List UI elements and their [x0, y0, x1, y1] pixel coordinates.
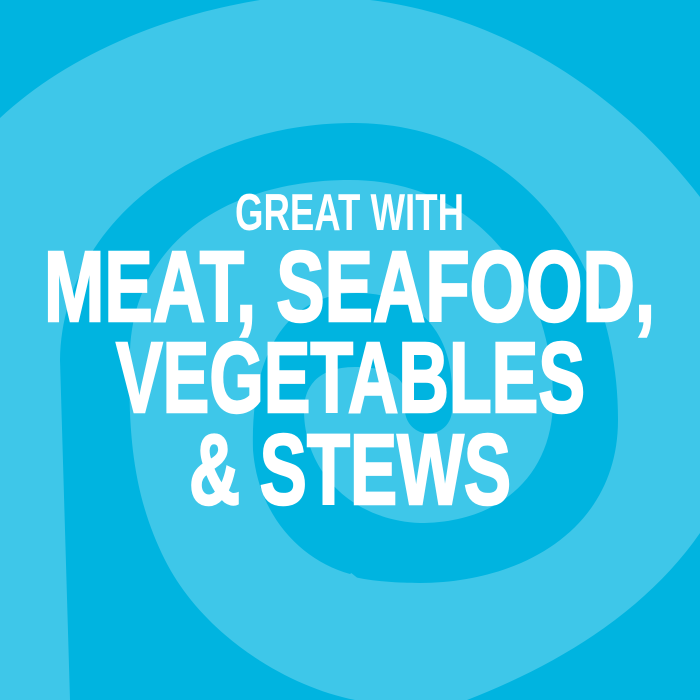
headline line 3: & STEWS — [189, 414, 511, 526]
heading: great with: GREAT WITH — [235, 184, 464, 242]
